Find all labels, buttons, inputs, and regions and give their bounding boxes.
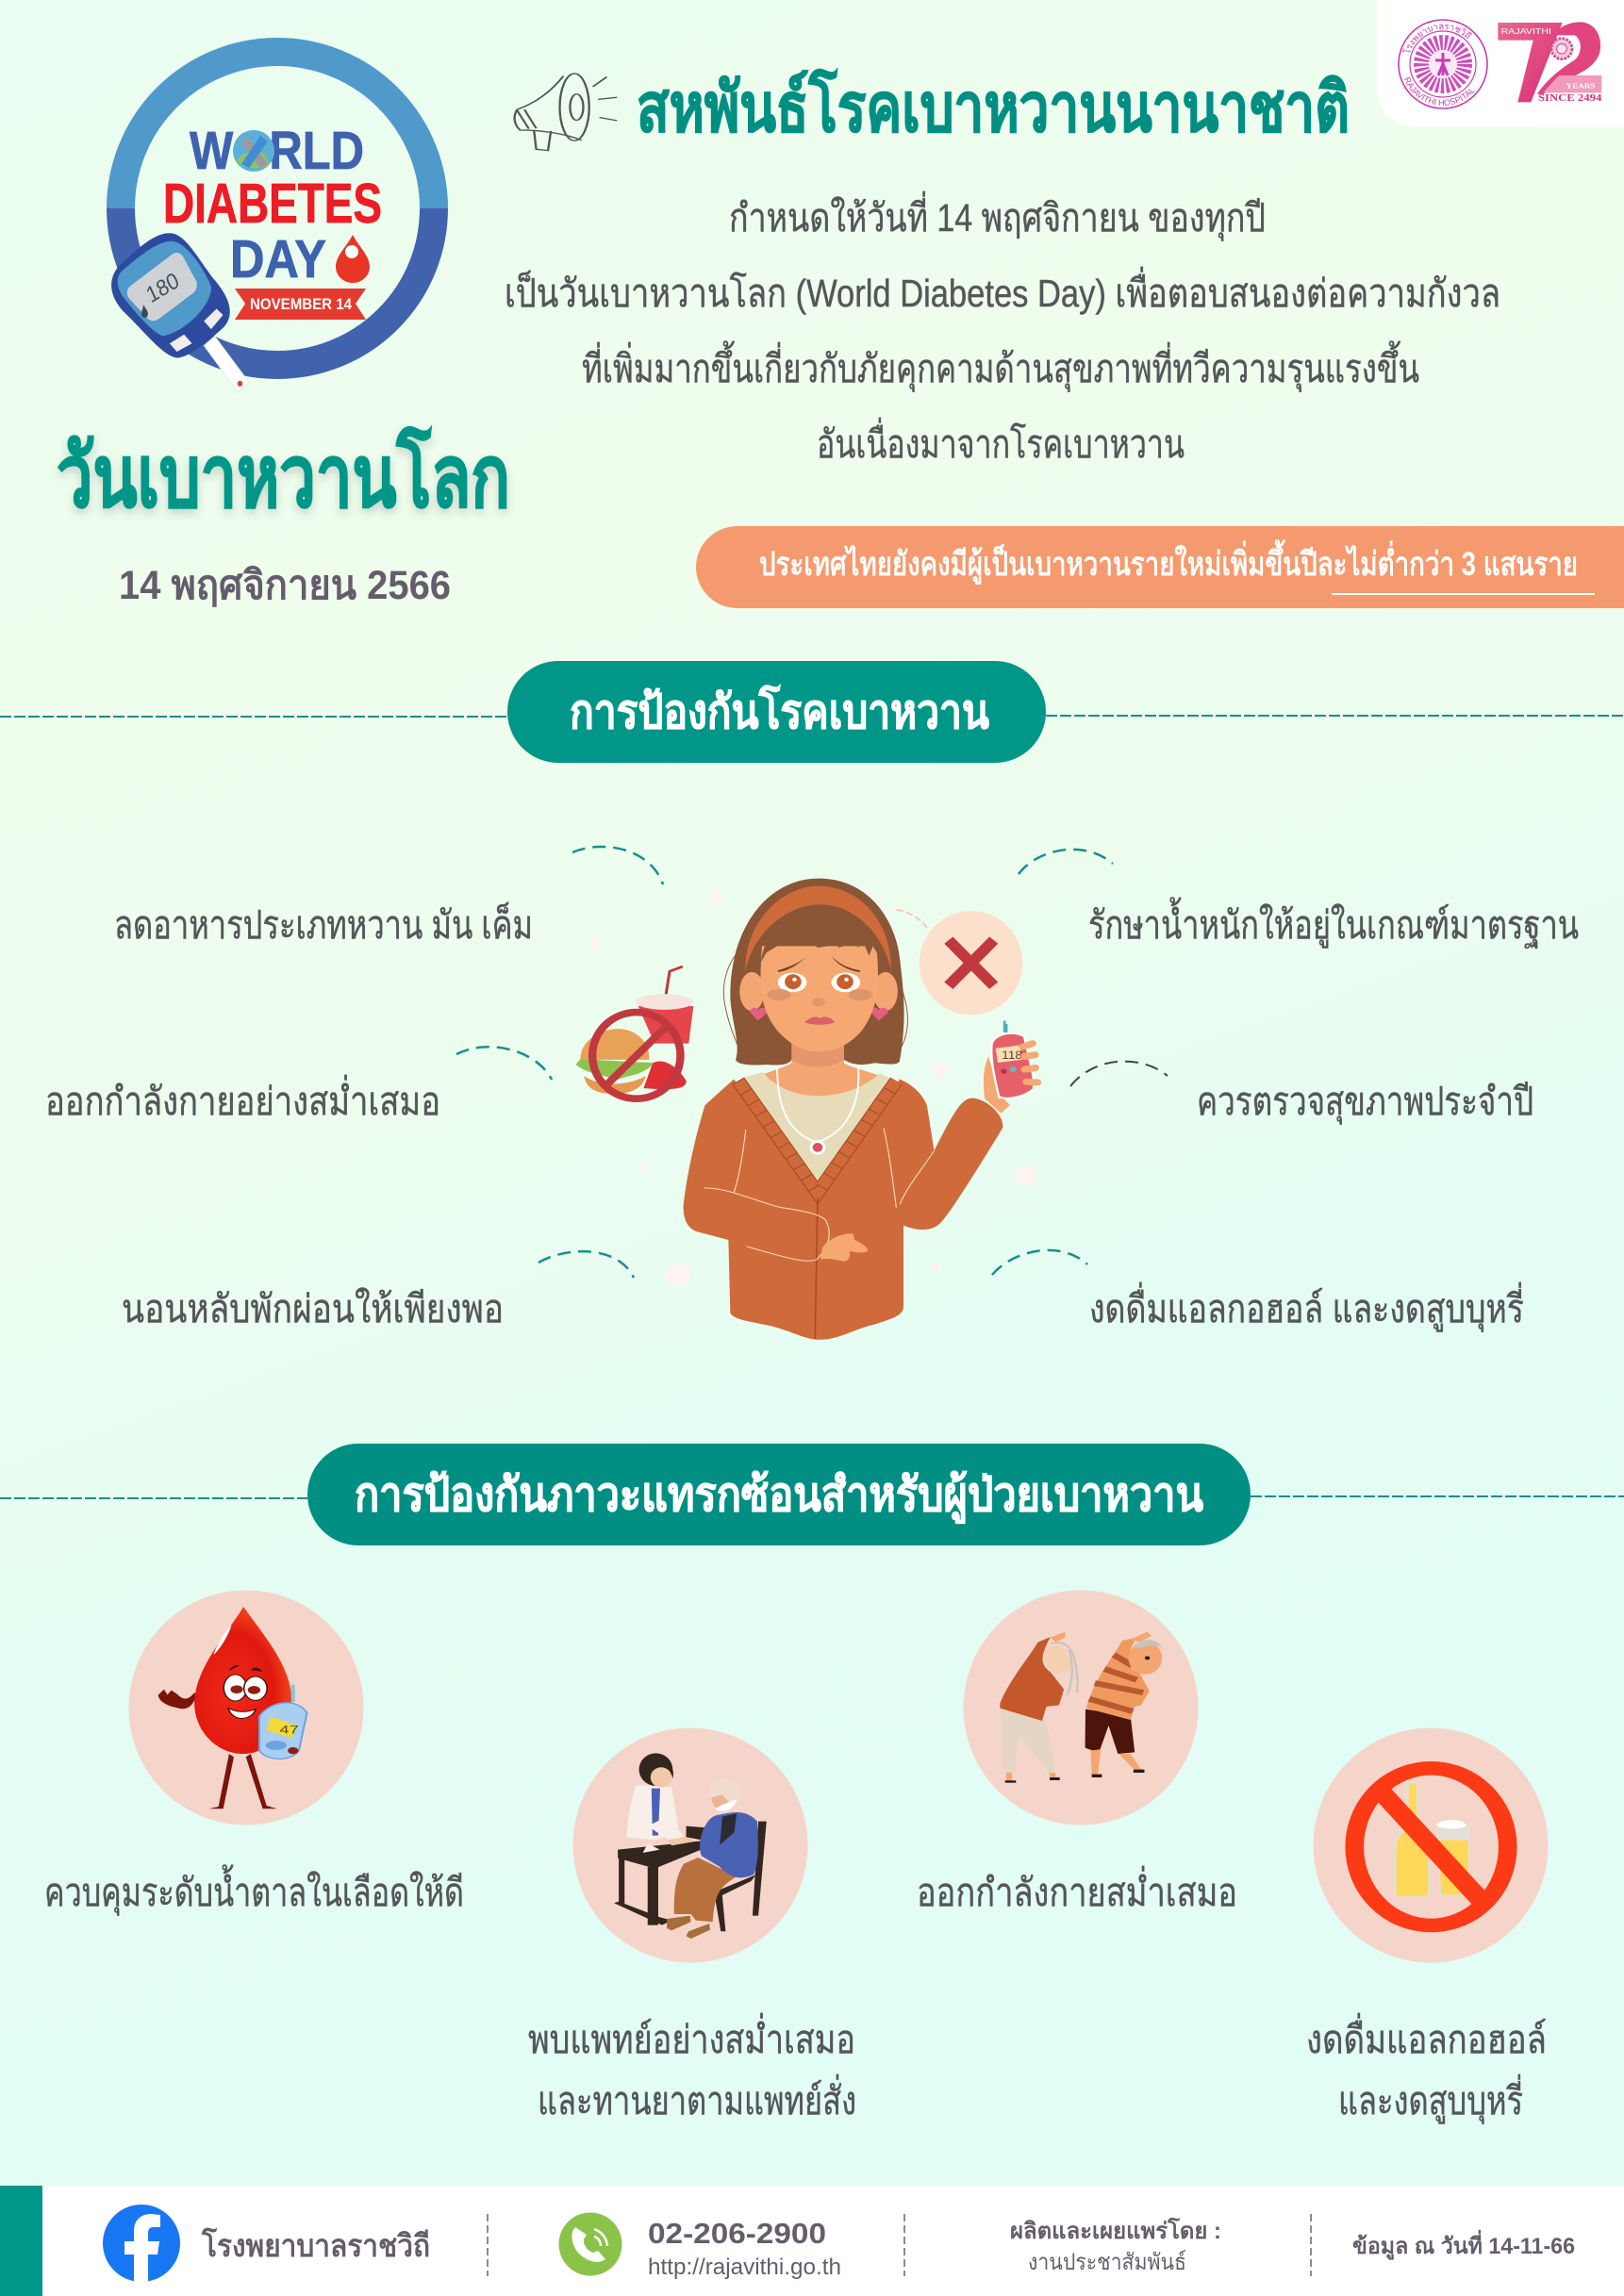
World Diabetes Day logo	[111, 52, 434, 392]
illustration: blood drop character	[158, 1607, 307, 1809]
complication tips text: และทานยาตามแพทย์สั่ง	[538, 2074, 856, 2123]
72 years logo: SINCE 2494	[1538, 93, 1601, 104]
Rajavithi hospital seal: โรงพยาบาลราชวิถี	[1401, 25, 1472, 53]
complication tips text: พบแพทย์อย่างสม่ำเสมอ	[528, 2013, 855, 2061]
72 years logo: RAJAVITHI	[1501, 26, 1551, 36]
Rajavithi hospital seal	[1398, 19, 1488, 109]
hospital logos	[1377, 0, 1624, 127]
phone number: 02-206-2900	[648, 2217, 826, 2250]
right hand holding meter	[984, 1021, 1037, 1114]
globe ribbon in the letter O	[233, 130, 274, 172]
section heading: diabetes prevention: การป้องกันโรคเบาหวาน	[570, 684, 989, 738]
prevention tips: นอนหลับพักผ่อนให้เพียงพอ	[122, 1287, 504, 1330]
logo wordmark	[163, 121, 382, 289]
72 years logo: YEARS	[1566, 81, 1595, 90]
November 14 ribbon	[235, 289, 366, 320]
title: World Diabetes Day (Thai): วันเบาหวานโลก	[57, 426, 510, 525]
right hand holding meter: 118	[1002, 1049, 1022, 1062]
dashed connector	[896, 910, 927, 928]
section heading: diabetes prevention	[507, 661, 1046, 763]
complication tips text	[44, 1864, 1547, 2124]
cardigan seams	[704, 1128, 935, 1339]
illustration: blood drop character: 47	[279, 1724, 299, 1736]
illustration: doctor checking patient	[614, 1753, 767, 1939]
soft background dots	[588, 891, 1037, 1286]
November 14 ribbon: NOVEMBER 14	[250, 295, 352, 313]
face	[760, 946, 878, 1051]
left hand on belly	[820, 1233, 868, 1262]
intro paragraph: ที่เพิ่มมากขึ้นเกี่ยวกับภัยคุกคามด้านสุขภาพที่ทวีความรุนแรงขึ้น	[582, 340, 1419, 392]
collar ribbing	[738, 1081, 896, 1193]
blood drop	[336, 235, 370, 283]
cream blouse	[745, 1072, 889, 1186]
neck and chest	[759, 1040, 880, 1097]
white logo card	[1377, 0, 1624, 127]
icon: no alcohol	[1354, 1768, 1508, 1925]
website: http://rajavithi.go.th	[648, 2255, 841, 2280]
icon: megaphone	[515, 74, 617, 151]
produced by	[1010, 2217, 1221, 2275]
X mark bubble	[920, 911, 1022, 1015]
produced by: งานประชาสัมพันธ์	[1028, 2249, 1186, 2275]
logo ring	[121, 52, 434, 365]
produced by: ผลิตและเผยแพร่โดย :	[1010, 2217, 1221, 2244]
necklace	[777, 1066, 858, 1154]
date: 14 พฤศจิกายน 2566	[119, 563, 451, 608]
circles: complication tips	[128, 1590, 1549, 1963]
Rajavithi hospital seal: RAJAVITHI HOSPITAL	[1404, 77, 1475, 106]
footer background	[0, 2186, 1624, 2296]
icon: phone	[558, 2212, 622, 2276]
prevention tips: งดดื่มแอลกอฮอล์ และงดสูบบุหรี่	[1089, 1282, 1524, 1332]
intro paragraph: อันเนื่องมาจากโรคเบาหวาน	[817, 418, 1185, 466]
72 years logo	[1498, 22, 1601, 104]
prevention tips: ลดอาหารประเภทหวาน มัน เค็ม	[114, 902, 533, 947]
data date: ข้อมูล ณ วันที่ 14-11-66	[1352, 2229, 1575, 2260]
glucose meter: 180	[142, 267, 183, 307]
headband	[745, 886, 891, 970]
hair	[723, 879, 907, 1065]
intro paragraph	[505, 191, 1500, 466]
illustration: worried woman with glucose meter	[576, 879, 1037, 1340]
prevention tips	[45, 897, 1579, 1332]
complication tips text: และงดสูบบุหรี่	[1338, 2074, 1523, 2124]
complication tips text: ควบคุมระดับน้ำตาลในเลือดให้ดี	[44, 1864, 464, 1916]
facebook page name: โรงพยาบาลราชวิถี	[201, 2227, 430, 2263]
bangs	[761, 904, 882, 963]
complication tips text: ออกกำลังกายสม่ำเสมอ	[917, 1866, 1237, 1914]
cardigan body	[684, 1080, 1003, 1340]
icon: facebook	[103, 2205, 180, 2282]
logo wordmark: DIABETES	[163, 173, 382, 235]
prevention tips: ออกกำลังกายอย่างสม่ำเสมอ	[45, 1075, 440, 1123]
logo wordmark: DAY	[230, 229, 326, 289]
illustration: elderly couple stretching	[1000, 1632, 1164, 1783]
intro paragraph: กำหนดให้วันที่ 14 พฤศจิกายน ของทุกปี	[729, 191, 1266, 241]
footer	[0, 2186, 1624, 2296]
section heading: complication prevention: การป้องกันภาวะแทรกซ้อนสำหรับผู้ป่วยเบาหวาน	[355, 1468, 1203, 1524]
heading: International Diabetes Federation: สหพันธ์โรคเบาหวานนานาชาติ	[637, 67, 1350, 146]
prevention tips: ควรตรวจสุขภาพประจำปี	[1197, 1080, 1533, 1125]
complication tips text: งดดื่มแอลกอฮอล์	[1306, 2013, 1547, 2061]
callout: new diabetes cases per year	[696, 526, 1624, 608]
logo wordmark: WORLD	[190, 121, 364, 181]
no fast food icon	[576, 966, 693, 1098]
glucose meter	[111, 233, 249, 392]
section heading: complication prevention	[307, 1444, 1251, 1545]
ears and earrings	[739, 972, 898, 1021]
eyes, brows, cheeks, nose and mouth	[767, 956, 872, 1025]
